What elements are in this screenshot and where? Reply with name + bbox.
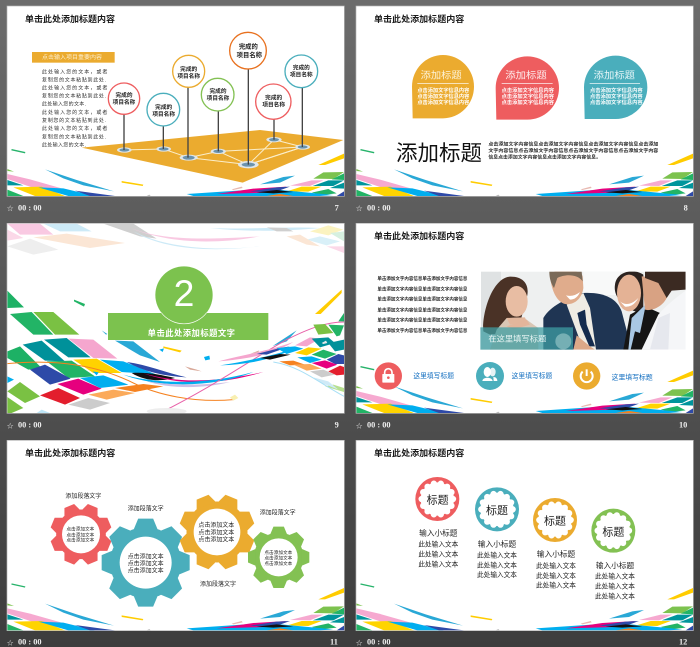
colourful mosaic artwork	[7, 224, 344, 415]
slide 10 footer	[356, 421, 687, 430]
slide 9 footer: 00 : 00	[18, 421, 42, 430]
green number circle	[155, 266, 213, 324]
pin 6	[256, 84, 291, 142]
caption: yellow: 输入小标题	[537, 549, 575, 559]
pin 6: 项目名称	[262, 100, 285, 108]
slide 9 footer	[7, 421, 339, 430]
droplet: red: 点击添加文字信息内容	[502, 93, 554, 100]
gear: green: 点击添加文本	[264, 549, 293, 556]
slide 8 footer	[356, 203, 688, 213]
caption: yellow	[536, 549, 576, 590]
caption: red	[418, 527, 459, 568]
badge: green	[591, 509, 635, 553]
gear: red: 点击添加文本	[66, 531, 95, 538]
caption: teal	[477, 538, 517, 579]
pin 1: 项目名称	[113, 98, 136, 106]
gear caption 3: 添加段落文字	[260, 508, 296, 516]
slide 9 footer: ☆	[7, 421, 14, 430]
slide 8 footer: 00 : 00	[367, 203, 391, 212]
slide 9 canvas	[7, 223, 344, 413]
slide 11 footer	[7, 638, 338, 647]
paragraph: 信息点击添加文字内容信息点击添加文字内容信息。	[488, 153, 601, 160]
droplet: yellow	[412, 55, 474, 118]
caption: red: 输入小标题	[419, 527, 458, 537]
badge: red: 标题	[427, 493, 449, 507]
slide 7 text header bar	[32, 52, 115, 63]
slide 7 orange platform	[82, 130, 343, 183]
slide 7 title: 单击此处添加标题内容	[25, 13, 115, 24]
slide 10 text lines	[377, 275, 468, 334]
slide 12 title: 单击此处添加标题内容	[374, 447, 465, 458]
slide 7 footer: ☆	[7, 204, 14, 213]
pin 4: 完成的	[210, 87, 227, 95]
caption: green: 此处输入文本	[595, 591, 635, 600]
slide 7 footer	[7, 203, 339, 213]
pin 5: 项目名称	[237, 50, 263, 59]
slide 10 title: 单击此处添加标题内容	[374, 230, 465, 241]
slide 7 body text: 此处输入您的文本，或者	[42, 68, 107, 75]
label 1: 这里填写标题	[413, 371, 454, 380]
badge: teal: 标题	[486, 503, 508, 517]
slide 7 body text: 此处输入您的文本，或者	[42, 109, 107, 116]
slide 8 footer: 8	[684, 203, 688, 212]
droplet: yellow: 点击添加文字信息内容	[417, 99, 469, 106]
green banner	[108, 313, 268, 340]
pin 7: 项目名称	[290, 71, 313, 79]
slide 11 decoration	[7, 583, 344, 630]
slide 7 body text: 此处输入您的文本，或者	[42, 85, 107, 92]
caption: yellow: 此处输入文本	[536, 581, 576, 590]
slide 7 body text: 复制您的文本粘贴到此处.	[42, 117, 106, 124]
icon: lock	[375, 362, 402, 390]
slide 12: scalloped circles	[356, 440, 693, 647]
pin 3: 完成的	[180, 65, 197, 73]
gear: teal: 点击添加文本	[128, 560, 164, 568]
gear: red: 点击添加文本	[66, 526, 95, 533]
pin 2	[147, 93, 180, 152]
gear: yellow	[168, 483, 266, 581]
slide 7 body text: 此处输入您的文本.	[42, 142, 86, 149]
slide 7 text header bar: 点击输入项目重要内容	[42, 53, 102, 61]
caption: teal: 此处输入文本	[477, 550, 517, 559]
caption: teal: 此处输入文本	[477, 560, 517, 569]
gear: teal	[102, 519, 190, 607]
pin 3	[173, 55, 205, 161]
gear: red	[41, 494, 121, 574]
slide 9: section divider	[7, 223, 344, 430]
slide 10 footer: ☆	[356, 421, 363, 430]
pin 5	[230, 32, 266, 168]
pin 6: 完成的	[265, 93, 282, 101]
caption: red: 此处输入文本	[418, 559, 459, 568]
caption: red: 此处输入文本	[418, 550, 459, 559]
gear caption 1: 添加段落文字	[65, 492, 101, 500]
slide 7 body text	[42, 68, 107, 149]
slide 7 canvas	[7, 6, 344, 196]
gear: green: 点击添加文本	[264, 560, 293, 567]
badge: yellow: 标题	[544, 514, 566, 528]
slide 10 text lines: 单击添加文字内容信息单击添加文字内容信息	[377, 285, 468, 292]
slide 7 footer: 00 : 00	[18, 203, 42, 212]
gear: teal: 点击添加文本	[128, 567, 164, 575]
caption: green: 输入小标题	[596, 560, 634, 570]
slide 12 footer	[356, 638, 687, 647]
slide 12 footer: 12	[679, 638, 687, 647]
droplet: yellow: 添加标题	[421, 70, 462, 82]
droplet: red	[496, 56, 559, 120]
badge: red	[415, 477, 459, 521]
slide 9 footer: 9	[335, 421, 339, 430]
droplet: teal: 点击添加文字信息内容	[590, 87, 643, 94]
pin 2: 完成的	[155, 103, 172, 111]
slide 8 canvas	[356, 6, 693, 196]
pin 7	[285, 55, 318, 150]
slide 7: map pins on platform	[7, 6, 344, 213]
caption: teal: 输入小标题	[478, 538, 516, 548]
slide 11 canvas	[7, 440, 344, 631]
caption: teal: 此处输入文本	[477, 570, 517, 579]
pin 7: 完成的	[293, 64, 310, 72]
slide 12 footer: 00 : 00	[367, 638, 391, 647]
slide 10 decoration	[356, 366, 693, 413]
slide 10 text lines: 单击添加文字内容信息单击添加文字内容信息	[377, 316, 468, 323]
gear: teal: 点击添加文本	[128, 552, 164, 560]
slide 10 text lines: 单击添加文字内容信息单击添加文字内容信息	[377, 296, 468, 303]
pin 1: 完成的	[116, 91, 133, 99]
slide 10 canvas	[356, 223, 693, 413]
slide 7 body text: 复制您的文本粘贴到此处.	[42, 93, 106, 100]
slide 7 network lines	[124, 140, 303, 165]
pin 3: 项目名称	[177, 72, 200, 80]
gear caption 4: 添加段落文字	[200, 580, 236, 588]
droplet: teal: 添加标题	[594, 70, 635, 82]
slide 10: photo and icons	[356, 223, 693, 430]
slide 7 body text: 此处输入您的文本，或者	[42, 125, 107, 132]
slide 10 text lines: 单击添加文字内容信息单击添加文字内容信息	[377, 275, 468, 282]
pin 1	[108, 83, 140, 153]
pin 5: 完成的	[239, 42, 258, 51]
pin 4: 项目名称	[207, 94, 230, 102]
slide 7 body text: 复制您的文本粘贴到此处.	[42, 77, 106, 84]
slide 8 decoration	[356, 149, 693, 196]
slide 11 title: 单击此处添加标题内容	[25, 447, 116, 458]
slide 11 footer: 11	[330, 638, 338, 647]
slide 8 footer: ☆	[356, 204, 363, 213]
paragraph: 点击添加文字内容信息点击添加文字内容信息点击添加文字内容信息点击添加	[488, 141, 659, 148]
slide 10 text lines: 单击添加文字内容信息单击添加文字内容信息	[377, 306, 468, 313]
slide 12 decoration	[356, 583, 693, 630]
pin 4	[201, 78, 234, 154]
gear: yellow: 点击添加文本	[198, 528, 234, 536]
droplet: red: 添加标题	[505, 70, 547, 82]
droplet: teal: 点击添加文字信息内容	[590, 99, 643, 106]
caption: yellow: 此处输入文本	[536, 571, 576, 580]
badge: teal	[475, 487, 519, 531]
badge: yellow	[533, 498, 577, 542]
caption: yellow: 此处输入文本	[536, 561, 576, 570]
slide 10 footer: 10	[679, 421, 687, 430]
slide 7 footer: 7	[335, 203, 339, 212]
caption: green: 此处输入文本	[595, 582, 635, 591]
photo caption overlay: 在这里填写标题	[488, 334, 546, 344]
paragraph: 文字内容信息点击添加文字内容信息点击添加文字内容信息点击添加文字内容	[488, 147, 659, 154]
photo caption overlay	[480, 327, 573, 350]
caption: green	[595, 560, 635, 600]
slide 10 footer: 00 : 00	[367, 421, 391, 430]
slide 8: three droplets	[356, 6, 693, 213]
slide 7 decoration	[7, 149, 344, 196]
gear: yellow: 点击添加文本	[198, 536, 234, 544]
droplet: teal	[584, 56, 647, 119]
slide 7 body text: 复制您的文本粘贴到此处.	[42, 133, 106, 140]
droplet: teal: 点击添加文字信息内容	[590, 93, 643, 100]
slide 11 footer: 00 : 00	[18, 638, 42, 647]
gear caption 2: 添加段落文字	[128, 505, 164, 513]
photo: business team	[481, 270, 686, 350]
gear: green: 点击添加文本	[264, 555, 293, 562]
badge: green: 标题	[602, 524, 624, 538]
label 3: 这里填写标题	[612, 373, 653, 382]
green number circle: 2	[174, 272, 194, 314]
pin 2: 项目名称	[152, 110, 175, 118]
banner text: 单击此处添加标题文字	[148, 328, 235, 338]
slide 12 canvas	[356, 440, 693, 631]
droplet: yellow: 点击添加文字信息内容	[417, 87, 469, 94]
droplet: red: 点击添加文字信息内容	[502, 87, 554, 94]
slide 10 text lines: 单击添加文字内容信息单击添加文字内容信息	[377, 327, 468, 334]
icon: power	[573, 362, 600, 390]
gear: yellow: 点击添加文本	[198, 521, 234, 529]
paragraph	[488, 141, 659, 160]
icon: people	[476, 362, 504, 390]
gear: green	[248, 527, 309, 588]
droplet: yellow: 点击添加文字信息内容	[417, 93, 469, 100]
droplet: red: 点击添加文字信息内容	[502, 99, 554, 106]
gear: red: 点击添加文本	[66, 537, 95, 544]
slide 7 body text: 此处输入您的文本.	[42, 101, 86, 108]
caption: red: 此处输入文本	[418, 540, 459, 549]
label 2: 这里填写标题	[512, 371, 553, 380]
slide 8 title: 单击此处添加标题内容	[374, 13, 465, 24]
slide 11: gears	[7, 440, 344, 647]
caption: green: 此处输入文本	[595, 572, 635, 581]
large heading: 添加标题	[396, 142, 482, 166]
